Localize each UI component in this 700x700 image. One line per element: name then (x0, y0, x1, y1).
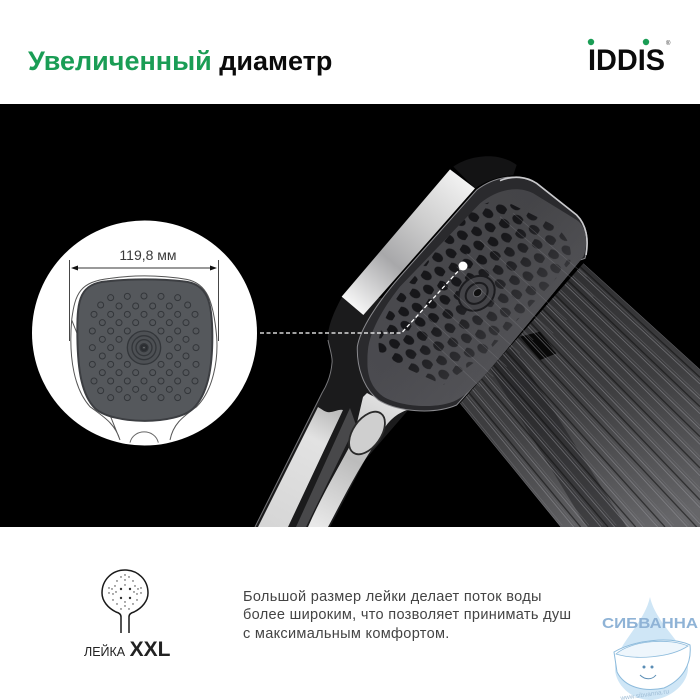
head center nozzle (452, 269, 502, 318)
photo panel: shower head on black background (0, 104, 700, 527)
handle button (342, 405, 392, 461)
title: Увеличенный диаметр (28, 46, 332, 76)
head face (77, 279, 212, 421)
head outline and handle neck (71, 276, 217, 440)
icon label: ЛЕЙКА XXL: ЛЕЙКА XXL (84, 638, 170, 661)
description text (243, 589, 571, 642)
head face with spray holes (368, 189, 586, 406)
head outer rim (357, 177, 587, 411)
spray holes (89, 293, 199, 401)
icon: XXL shower head (101, 569, 149, 633)
callout circle: front view of the head (32, 220, 257, 446)
dimension: 119,8 mm (70, 247, 218, 341)
watermark: Sibvanna (602, 598, 698, 700)
description text: с максимальным комфортом. (243, 626, 450, 642)
description text: Большой размер лейки делает поток воды (243, 589, 542, 605)
water spray (417, 213, 700, 527)
callout: dashed leader line with dot (260, 262, 468, 333)
shower handle (255, 297, 470, 527)
center nozzle (127, 331, 161, 364)
watermark: Sibvanna: СИБВАННА (602, 615, 698, 632)
description text: более широким, что позволяет принимать душ (243, 607, 571, 623)
dimension: 119,8 mm: 119,8 мм (119, 247, 177, 263)
chrome top strip of the head (342, 169, 475, 315)
brand logo: IDDIS: ® (666, 40, 671, 47)
